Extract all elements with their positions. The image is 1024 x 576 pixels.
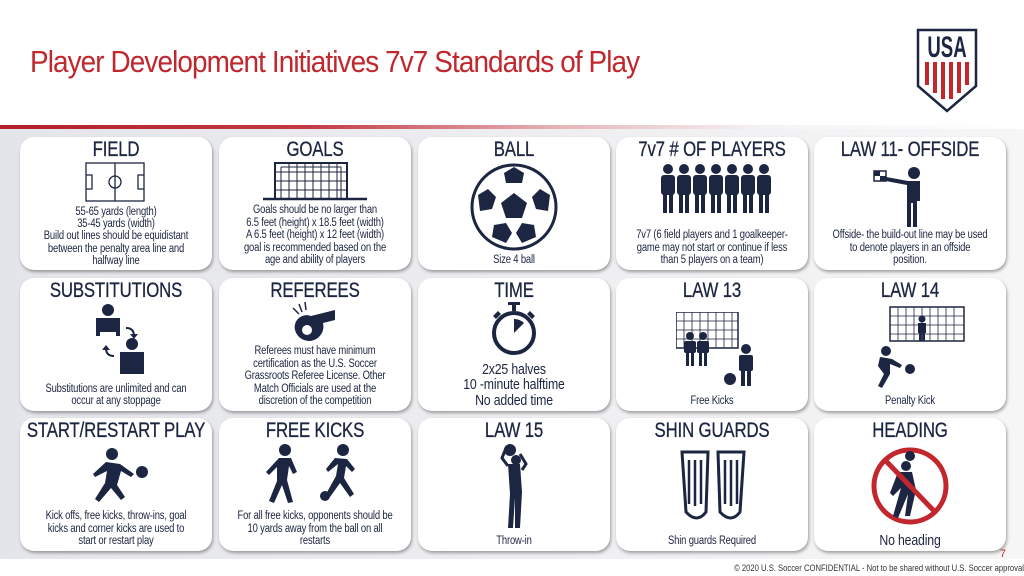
panel: offside: position. [893,254,927,266]
panel: free kicks: 10 yards away from the ball on all [248,523,382,535]
panel: goals: Goals should be no larger than [253,204,377,216]
panel: free kicks: restarts [300,535,330,547]
panel: law 15: LAW 15 [485,419,543,442]
panel: field: 35-45 yards (width) [77,218,155,230]
panel: goals: GOALS [286,138,344,161]
panel: law 14 [814,278,1006,411]
panel: goals [219,137,411,270]
panel: field: halfway line [92,255,140,267]
panel: free kicks: For all free kicks, opponents should be [237,510,393,522]
panel: free kicks: FREE KICKS [266,419,364,442]
panel: ball [418,137,610,270]
panel: players: 7v7 (6 field players and 1 goalkeeper- [636,229,788,241]
panel: field: 55-65 yards (length) [75,206,157,218]
panel: start/restart: kicks and corner kicks are used to [48,523,184,535]
panel: law 13: LAW 13 [683,279,741,302]
panel: offside [814,137,1006,270]
icon: free kick wall [676,312,753,386]
panel: players [616,137,808,270]
panel: field [20,137,212,270]
panel: referees: Match Officials are used at the [254,383,376,395]
panel: law 15: Throw-in [496,535,532,547]
panel: goals: goal is recommended based on the [244,242,386,254]
panel: ball: BALL [494,138,534,161]
panel: law 14: LAW 14 [881,279,939,302]
panel: players: than 5 players on a team) [661,254,763,266]
panel: players: game may not start or continue if less [637,242,787,254]
panel: shin guards: Shin guards Required [668,535,756,547]
icon: penalty kick [878,306,965,388]
panel: field: between the penalty area line and [48,243,184,255]
panel: field: FIELD [93,138,139,161]
panel: start/restart: START/RESTART PLAY [27,419,205,442]
logo: USA crest: USA [927,31,967,64]
panel: goals: 6.5 feet (height) x 18.5 feet (width) [246,217,384,229]
panel: players: 7v7 # OF PLAYERS [638,138,786,161]
panel: referees: discretion of the competition [259,395,371,407]
panel: substitutions: SUBSTITUTIONS [50,279,182,302]
panel: start/restart: Kick offs, free kicks, throw-ins, goal [46,510,186,522]
panel: law 14: Penalty Kick [885,395,935,407]
icon: no heading [872,448,948,524]
panel: offside: LAW 11- OFFSIDE [841,138,979,161]
icon: field [85,162,145,202]
logo: USA crest [916,28,978,112]
panel: time: TIME [494,279,534,302]
panel: shin guards [616,418,808,551]
panel: ball: Size 4 ball [493,254,535,266]
panel: goals: A 6.5 feet (height) x 12 feet (width) [246,229,384,241]
panel: start/restart: start or restart play [78,535,154,547]
panel: start/restart [20,418,212,551]
icon: throw-in [500,444,528,528]
panel: time [418,278,610,411]
panel: law 13: Free Kicks [691,395,733,407]
icon: goal [263,162,367,200]
panel: time: 10 -minute halftime [463,376,565,393]
panel: time: No added time [475,392,553,408]
panel: offside: to denote players in an offside [850,242,970,254]
panel: offside: Offside- the build-out line may be used [833,229,987,241]
panel: referees: certification as the U.S. Soccer [253,358,377,370]
panel: referees [219,278,411,411]
panel: substitutions: Substitutions are unlimited and can [45,383,187,395]
icon: soccer ball [470,164,558,250]
icon: shin guards [680,450,746,520]
panel: referees: Referees must have minimum [254,345,375,357]
icon: assistant referee with flag [873,167,920,227]
icon: seven players [661,164,771,213]
panel: shin guards: SHIN GUARDS [655,419,769,442]
title: Player Development Initiatives 7v7 Standards of Play [30,44,639,79]
icon: two players [266,444,355,503]
footer: © 2020 U.S. Soccer CONFIDENTIAL - Not to be shared without U.S. Soccer approval [734,563,1024,573]
panel: goals: age and ability of players [265,254,365,266]
panel: time: 2x25 halves [482,360,546,378]
panel: law 15 [418,418,610,551]
icon: whistle [292,302,335,341]
panel: heading: No heading [879,532,941,549]
icon: kicking player [93,448,148,502]
panel: referees: REFEREES [270,279,360,302]
panel: field: Build out lines should be equidistant [44,230,188,242]
panel: heading: HEADING [872,419,948,442]
panel: substitutions [20,278,212,411]
panel: law 13 [616,278,808,411]
panel: free kicks [219,418,411,551]
panel: heading [814,418,1006,551]
icon: stopwatch [492,302,536,355]
panel: substitutions: occur at any stoppage [71,395,161,407]
panel: referees: Grassroots Referee License. Other [245,370,385,382]
page number: 7 [1000,548,1006,560]
icon: substitution [96,304,144,374]
